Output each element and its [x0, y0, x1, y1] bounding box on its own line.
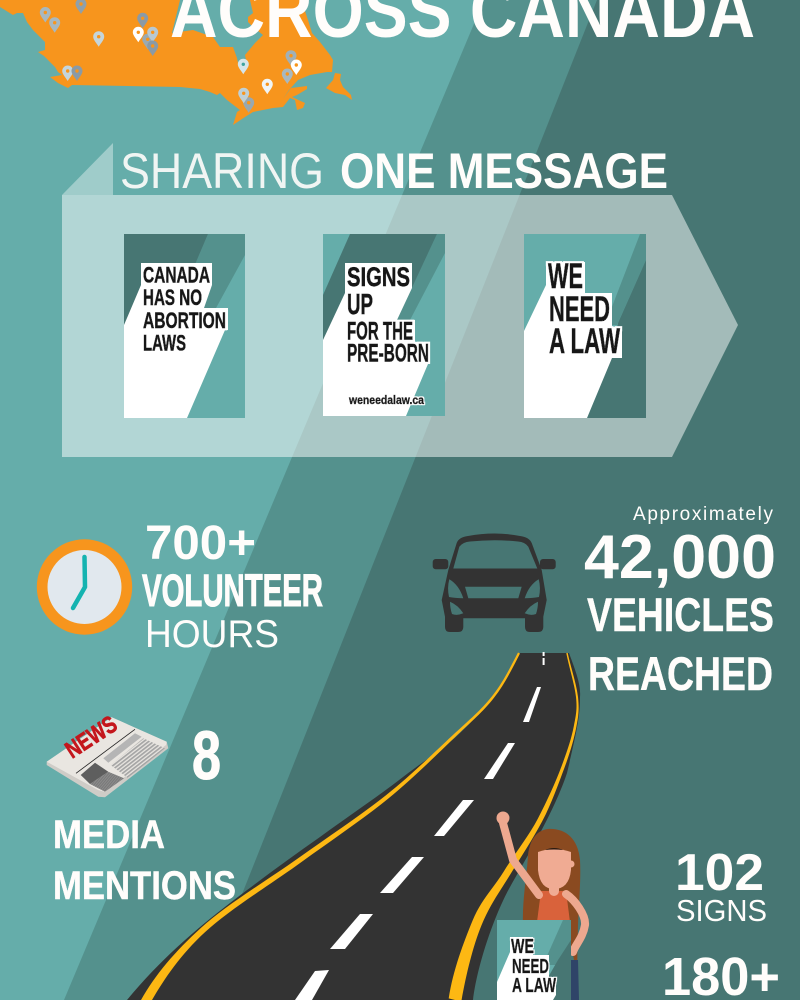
poster: Signs up for the pre-born: SIGNS — [347, 262, 410, 292]
stat: 8 media mentions: MEDIA — [53, 813, 165, 857]
stat: 700+ volunteer hours: 700+ — [145, 517, 256, 570]
sign — [497, 920, 571, 1000]
icon: newspaper — [47, 711, 168, 797]
heading: sharing one message — [120, 143, 668, 199]
road — [127, 652, 580, 1000]
news headline: NEWS — [61, 711, 122, 764]
stat: 102 signs, 180+ — [662, 844, 780, 1000]
heading: sharing one message: ONE MESSAGE — [340, 143, 668, 199]
poster: We need a law — [524, 234, 646, 418]
stat: 700+ volunteer hours: VOLUNTEER — [142, 565, 323, 616]
heading: sharing one message: SHARING — [120, 143, 324, 199]
poster: Canada has no abortion laws — [124, 234, 245, 418]
sign: A LAW — [512, 975, 556, 997]
poster: Signs up for the pre-born — [323, 234, 445, 416]
sign: WE — [511, 936, 534, 958]
stat: 102 signs, 180+: 102 — [675, 844, 764, 902]
arrow panel with posters — [62, 143, 738, 457]
stat: 700+ volunteer hours — [142, 517, 323, 656]
icon: car — [433, 534, 556, 632]
poster: Signs up for the pre-born: weneedalaw.ca — [348, 393, 424, 407]
stat: 8 media mentions — [53, 717, 236, 908]
poster: We need a law: A LAW — [549, 322, 620, 361]
stat: 42,000 vehicles reached — [584, 504, 776, 700]
stat: 8 media mentions: MENTIONS — [53, 864, 236, 908]
poster: Canada has no abortion laws: HAS NO — [143, 285, 202, 310]
poster: Canada has no abortion laws: ABORTION — [143, 308, 226, 333]
stat: 102 signs, 180+: SIGNS — [676, 893, 767, 928]
poster: Signs up for the pre-born: FOR THE — [347, 318, 413, 346]
poster: We need a law: WE — [548, 257, 583, 296]
stat: 42,000 vehicles reached: 42,000 — [584, 523, 776, 592]
road edge lines — [141, 652, 579, 1000]
poster: Canada has no abortion laws: CANADA — [143, 262, 210, 288]
illustration: woman holding sign — [496, 812, 585, 1000]
map of Canada with pins — [0, 0, 352, 125]
sign: NEED — [512, 956, 549, 978]
stat: 700+ volunteer hours: HOURS — [145, 613, 279, 656]
stat: 42,000 vehicles reached: Approximately — [633, 504, 774, 525]
poster: We need a law: NEED — [549, 290, 610, 329]
poster: Signs up for the pre-born: PRE-BORN — [347, 340, 429, 368]
stat: 8 media mentions: 8 — [192, 717, 221, 794]
road centre dashes — [295, 652, 545, 1000]
poster: Signs up for the pre-born: UP — [347, 289, 373, 321]
poster: Canada has no abortion laws: LAWS — [143, 330, 186, 356]
icon: clock — [37, 539, 132, 635]
